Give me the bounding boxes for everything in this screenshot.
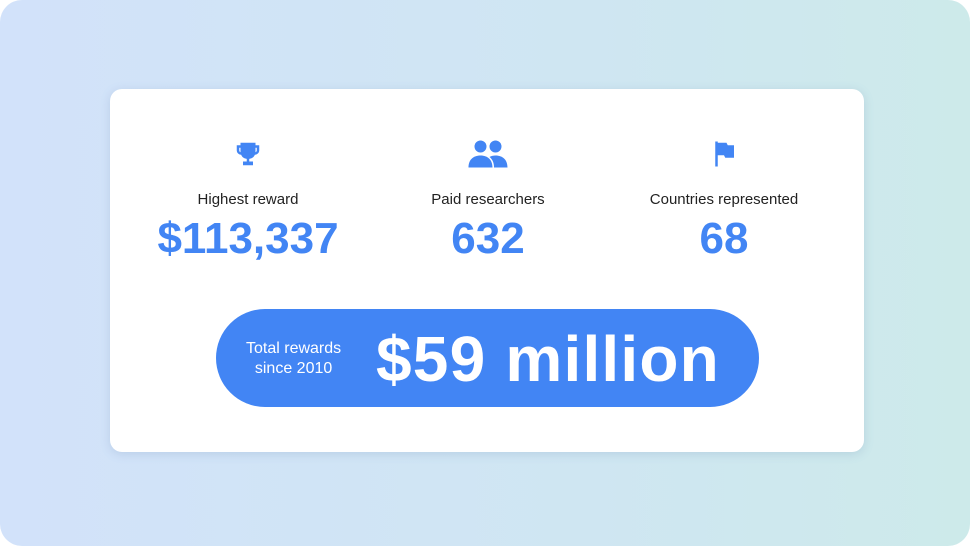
stat: highest reward: Highest reward [198,191,298,208]
stat: paid researchers: 632 [451,214,525,263]
pill: total rewards [216,309,759,407]
pill subtitle [246,340,341,377]
stat: highest reward: $113,337 [157,214,339,263]
icon: trophy [236,142,260,166]
stat: paid researchers [431,140,545,263]
icon: people [468,140,508,168]
pill subtitle: Total rewards [246,340,341,357]
stat: countries represented [650,142,798,263]
icon: flag [715,142,734,166]
card [110,89,864,452]
stat: paid researchers: Paid researchers [431,191,545,208]
stat: highest reward [157,142,339,263]
stat: countries represented: Countries represented [650,191,798,208]
pill big number: $59 million [376,323,720,395]
stat: countries represented: 68 [700,214,748,263]
pill subtitle: since 2010 [255,360,332,377]
